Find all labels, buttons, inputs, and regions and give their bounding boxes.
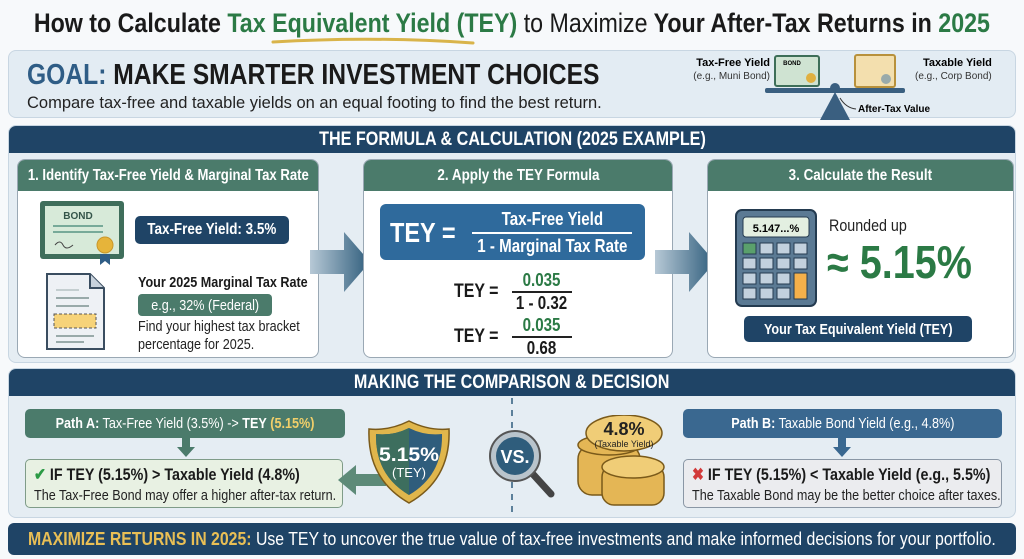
path B label (683, 409, 1002, 438)
icon: coins 4.8%: (Taxable Yield) (594, 439, 654, 449)
footer banner: MAXIMIZE RETURNS IN 2025: Use TEY to uncover the true value of tax-free investments and make informed decisions for your portfolio. (28, 528, 996, 548)
icon: balance scale: (e.g., Muni Bond) (693, 71, 770, 82)
icon: shield TEY (368, 420, 450, 504)
formula box: TEY = (390, 217, 456, 248)
icon: bond: BOND (63, 211, 93, 222)
result A (25, 459, 343, 508)
panel: formula & calculation (8, 125, 1016, 363)
label: your TEY: Your Tax Equivalent Yield (TEY) (764, 320, 952, 338)
section header: THE FORMULA & CALCULATION (2025 EXAMPLE) (319, 128, 705, 150)
icon: shield TEY: (TEY) (392, 465, 426, 480)
arrow left (338, 465, 386, 495)
path A label (25, 409, 345, 438)
text: bracket hint: percentage for 2025. (138, 336, 254, 353)
card 2 header (364, 160, 672, 191)
section header: MAKING THE COMPARISON & DECISION (354, 372, 670, 392)
arrow 2 (655, 232, 707, 292)
label: your TEY (744, 316, 972, 342)
result value: ≈ 5.15% (827, 236, 972, 288)
arrow down A (177, 438, 195, 457)
icon: coins 4.8%: 4.8% (603, 419, 645, 439)
formula box (380, 204, 645, 260)
result B: The Taxable Bond may be the better choice after taxes. (692, 487, 1001, 504)
card 1 (17, 159, 319, 358)
calculation step 1: 1 - 0.32 (516, 293, 568, 313)
icon: tax document (46, 273, 105, 350)
underline swoosh (272, 38, 474, 44)
arrow 1 (310, 232, 363, 292)
calculation step 2: TEY = (454, 326, 499, 347)
panel: goal (8, 50, 1016, 118)
goal heading: GOAL: MAKE SMARTER INVESTMENT CHOICES (27, 59, 599, 91)
text: bracket hint: Find your highest tax bracket (138, 318, 300, 335)
icon: balance scale (693, 54, 992, 120)
card 3 header (708, 160, 1013, 191)
divider dashed (511, 398, 513, 512)
icon: bond (40, 201, 124, 265)
icon: calculator: 5.147...% (753, 223, 799, 235)
title: How to Calculate Tax Equivalent Yield (TEY) to Maximize Your After-Tax Returns in 2025 (34, 8, 990, 38)
calculation step 1 (454, 270, 572, 313)
calculation step 1: TEY = (454, 281, 499, 302)
panel: comparison & decision (8, 368, 1016, 518)
section header (9, 369, 1015, 396)
card 3 (707, 159, 1014, 358)
goal subtitle: Compare tax-free and taxable yields on an equal footing to find the best return. (27, 93, 602, 112)
calculation step 2: 0.68 (527, 338, 557, 358)
section header (9, 126, 1015, 153)
icon: balance scale: Tax-Free Yield (696, 57, 770, 69)
icon: coins 4.8% (577, 415, 665, 506)
text: rounded up: Rounded up (829, 216, 907, 235)
icon: magnifier vs (489, 430, 554, 498)
footer banner (8, 523, 1016, 555)
arrow down B (833, 438, 851, 457)
result A: ✔ IF TEY (5.15%) > Taxable Yield (4.8%) (34, 465, 300, 484)
formula box: Tax-Free Yield (501, 209, 603, 229)
text: bracket hint (138, 318, 300, 353)
icon: shield TEY: 5.15% (379, 445, 439, 466)
callout: tax-free yield: Tax-Free Yield: 3.5% (148, 221, 276, 238)
card 2 (363, 159, 673, 358)
path A label: Path A: Tax-Free Yield (3.5%) -> TEY (5.15%) (56, 415, 314, 432)
result B: ✖ IF TEY (5.15%) < Taxable Yield (e.g., 5.5%) (692, 465, 990, 484)
text: marginal tax rate: Your 2025 Marginal Tax Rate (138, 274, 308, 291)
callout: tax-free yield (135, 216, 289, 244)
card 1 header (18, 160, 318, 191)
card 3 header: 3. Calculate the Result (789, 166, 932, 184)
icon: balance scale: BOND (783, 61, 801, 67)
card 2 header: 2. Apply the TEY Formula (437, 166, 599, 184)
path B label: Path B: Taxable Bond Yield (e.g., 4.8%) (731, 415, 954, 432)
result B (683, 459, 1002, 508)
calculation step 2: 0.035 (523, 315, 561, 335)
icon: balance scale: After-Tax Value (858, 104, 930, 115)
icon: balance scale: (e.g., Corp Bond) (915, 71, 992, 82)
result A: The Tax-Free Bond may offer a higher after-tax return. (34, 487, 336, 504)
pill: 32% federal: e.g., 32% (Federal) (151, 296, 259, 314)
icon: balance scale: Taxable Yield (923, 57, 992, 69)
calculation step 2 (454, 315, 572, 358)
pill: 32% federal (138, 294, 272, 316)
calculation step 1: 0.035 (523, 270, 561, 290)
card 1 header: 1. Identify Tax-Free Yield & Marginal Tax Rate (28, 166, 308, 184)
formula box: 1 - Marginal Tax Rate (477, 236, 627, 256)
icon: magnifier vs: VS. (500, 447, 530, 467)
icon: calculator (735, 209, 817, 307)
